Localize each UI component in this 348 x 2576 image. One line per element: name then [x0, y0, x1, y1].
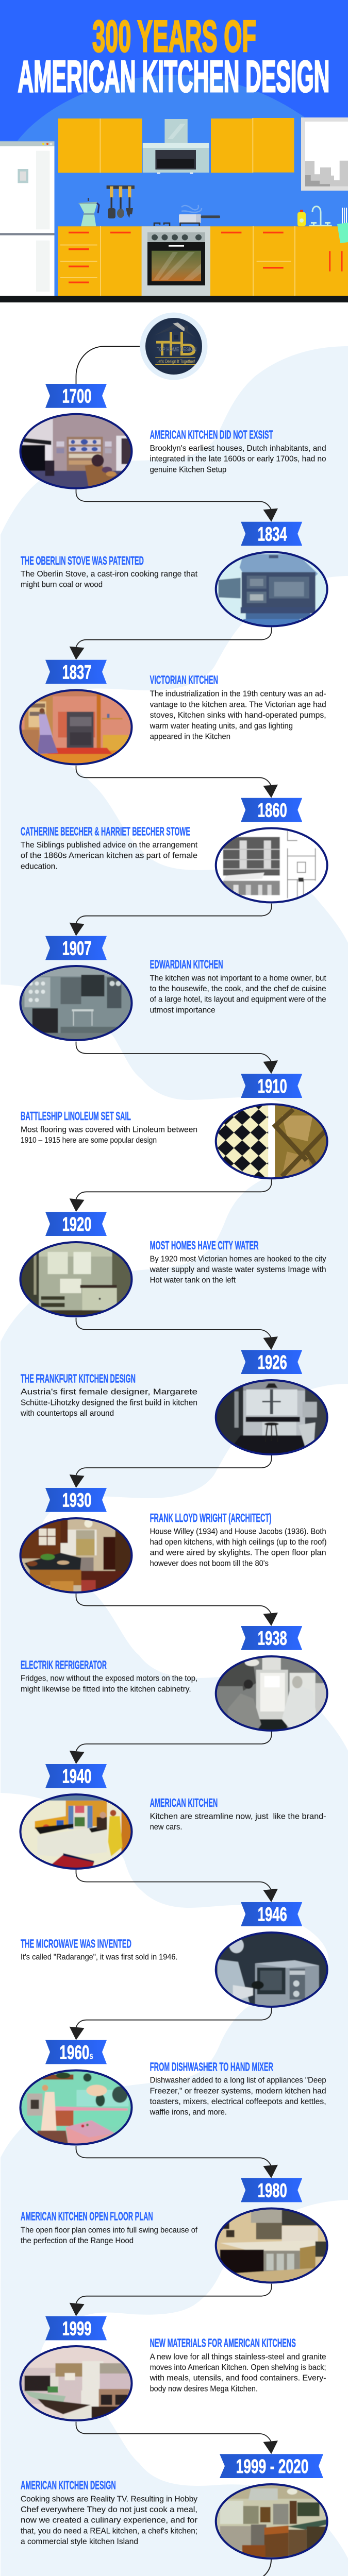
year banner 1910	[241, 1074, 302, 1098]
body text 1907: utmost importance	[150, 1006, 216, 1014]
photo: Frank Lloyd Wright kitchen	[20, 1517, 133, 1594]
year banner 1920: 1920	[62, 1214, 92, 1235]
heading: electric refrigerator: ELECTRIK REFRIGERATOR	[21, 1658, 107, 1671]
photo: linoleum patterns	[215, 1103, 328, 1179]
photo: early Dutch kitchen	[20, 413, 133, 489]
body text 1930: however does not boom till the 80's	[150, 1559, 269, 1568]
year banner 1860	[241, 798, 302, 822]
body text 1920: Hot water tank on the left	[150, 1276, 236, 1285]
year banner 1999 - 2020: 1999 - 2020	[236, 2456, 308, 2478]
body text 1920	[150, 1255, 326, 1285]
body text 1907	[150, 974, 326, 1014]
body text 1999-2020	[21, 2495, 198, 2546]
arrow: 1980 to 1999	[70, 2284, 272, 2316]
year banner 1980: 1980	[258, 2180, 287, 2201]
refrigerator	[0, 141, 55, 296]
body text 1999: moves into American Kitchen. Open shelving is back;	[150, 2363, 326, 2372]
body text 1999-2020: a commercial style kitchen Island	[21, 2537, 138, 2546]
towel and utensils	[337, 208, 348, 243]
body text 1940	[150, 1812, 326, 1832]
photo: stainless and granite kitchen	[20, 2345, 133, 2422]
body text 1907: to the housewife, the cook, and the chef de cuisine	[150, 985, 326, 993]
year banner 1946: 1946	[258, 1904, 287, 1926]
body text 1938: Fridges, now without the exposed motors on the top,	[21, 1674, 197, 1683]
year banner 1940: 1940	[62, 1766, 92, 1788]
year banner 1940	[45, 1764, 107, 1788]
photo: Frankfurt kitchen	[215, 1379, 328, 1456]
body text 1837	[150, 690, 326, 741]
arrow: 1910 to 1920	[70, 1179, 272, 1212]
body text 1910: Most flooring was covered with Linoleum between	[21, 1125, 197, 1134]
body text 1920: water supply and waste water systems Image with	[150, 1265, 326, 1274]
body text 1920: By 1920 most Victorian homes are hooked to the city	[150, 1255, 326, 1263]
body text 1837: appeared in the Kitchen	[150, 733, 230, 741]
body text 1999: body now desires Mega Kitchen.	[150, 2384, 258, 2393]
body text 1700: integrated in the late 1600s or early 1700s, had no	[150, 455, 326, 464]
arrow: 1999 to 1999-2020	[76, 2422, 278, 2454]
body text 1940: Kitchen are streamline now, just like the brand-	[150, 1812, 326, 1821]
body text 1834: might burn coal or wood	[21, 581, 103, 589]
arrow: 1860 to 1907	[70, 904, 272, 936]
year banner 1960s: 1960	[59, 2042, 89, 2063]
year banner 1930	[45, 1488, 107, 1512]
heading: Oberlin stove: THE OBERLIN STOVE WAS PATENTED	[21, 554, 144, 567]
body text 1907: The kitchen was not important to a home owner, but	[150, 974, 326, 982]
body text 1940: new cars.	[150, 1823, 182, 1832]
body text 1926: Schütte-Lihotzky designed the first build in kitchen	[21, 1398, 197, 1407]
body text 1910	[21, 1125, 197, 1145]
body text 1960s: Dishwasher added to a long list of appliances "Deep	[150, 2076, 326, 2085]
body text 1930: and were aired by skylights. The open floor plan	[150, 1549, 326, 1557]
year banner 1926: 1926	[258, 1352, 287, 1374]
body text 1930	[150, 1527, 327, 1568]
arrow: 1907 to 1910	[76, 1042, 278, 1074]
dish soap	[297, 210, 306, 226]
body text 1999	[150, 2352, 326, 2393]
arrow: 1940 to 1946	[76, 1870, 278, 1902]
year banner 1837: 1837	[62, 662, 92, 683]
year banner 1999: 1999	[62, 2318, 92, 2340]
logo badge	[140, 312, 207, 380]
photo: Radarange microwave	[215, 1931, 328, 2008]
body text 1700	[150, 444, 326, 474]
body text 1980	[21, 2226, 198, 2245]
year banner 1999 - 2020	[220, 2454, 323, 2478]
body text 1946: It's called "Radarange", it was first sold in 1946.	[21, 1953, 177, 1962]
photo: city water kitchen	[20, 1241, 133, 1317]
arrow: 1930 to 1938	[76, 1594, 278, 1626]
year banner 1837	[45, 660, 107, 684]
body text 1980: The open floor plan comes into full swing because of	[21, 2226, 198, 2234]
body text 1837: vantage to the kitchen area. The Victorian age had	[150, 701, 326, 709]
body text 1860	[21, 841, 198, 871]
body text 1930: had open kitchens, with high ceilings (up to the roof)	[150, 1538, 327, 1547]
arrow: 1837 to 1860	[76, 766, 278, 798]
year banner 1910: 1910	[258, 1076, 287, 1097]
year banner 1920	[45, 1212, 107, 1236]
logo badge: Let's Design It Together!	[157, 359, 195, 364]
photo: Edwardian kitchen	[20, 965, 133, 1041]
body text 1907: of a large hotel, its layout and equipment were of the	[150, 995, 326, 1004]
heading: microwave: THE MICROWAVE WAS INVENTED	[21, 1937, 131, 1951]
steaming pot on burners	[154, 205, 220, 226]
body text 1860: The Siblings published advice on the arrangement	[21, 841, 198, 850]
range hood	[143, 119, 209, 174]
body text 1834: The Oberlin Stove, a cast-iron cooking range that	[21, 570, 198, 579]
body text 1926	[20, 1388, 197, 1418]
body text 1930: House Willey (1934) and House Jacobs (1936). Both	[150, 1527, 326, 1536]
body text 1960s	[150, 2076, 326, 2117]
year banner 1834: 1834	[258, 523, 287, 545]
year banner 1946	[241, 1902, 302, 1926]
arrow: 1920 to 1926	[76, 1318, 278, 1350]
photo: open floor plan kitchen	[215, 2207, 328, 2283]
title	[18, 12, 329, 101]
body text 1999-2020: Cooking shows are Reality TV. Resulting in Hobby	[21, 2495, 197, 2503]
year banner 1960s: s	[90, 2050, 93, 2061]
body text 1837: stoves, Kitchen sinks with hand-operated pumps,	[150, 711, 326, 720]
moka pot	[78, 198, 99, 226]
stove	[142, 226, 210, 296]
heading: American kitchen design: AMERICAN KITCHEN DESIGN	[21, 2479, 116, 2492]
year banner 1999	[45, 2316, 107, 2340]
body text 1926: with countertops all around	[20, 1409, 114, 1418]
body text 1700: Brooklyn's earliest houses, Dutch inhabitants, and	[150, 444, 326, 453]
hanging utensils	[107, 185, 135, 218]
arrow: 1926 to 1930	[70, 1455, 272, 1488]
arrow: 1946 to 1960s	[70, 2008, 272, 2040]
body text 1926: Austria's first female designer, Margarete	[21, 1388, 197, 1397]
arrow: 1960s to 1980	[76, 2146, 278, 2178]
body text 1960s: toasters, mixers, electrical coffeepots and kettles,	[150, 2097, 326, 2106]
window with skyline	[301, 117, 348, 191]
faucet	[309, 207, 332, 226]
year banner 1980	[241, 2178, 302, 2202]
year banner 1700	[45, 384, 107, 408]
body text 1938: might likewise be fitted into the kitchen cabinetry.	[21, 1685, 191, 1693]
year banner 1930: 1930	[62, 1490, 92, 1512]
body text 1860: education.	[21, 862, 58, 871]
photo: commercial style kitchen	[215, 2483, 328, 2560]
upper cabinets right	[211, 118, 294, 173]
year banner 1938	[241, 1626, 302, 1650]
arrow: 1999-2020 to 2020	[168, 2560, 271, 2576]
year banner 1907	[45, 936, 107, 960]
heading: open floor plan: AMERICAN KITCHEN OPEN FLOOR PLAN	[21, 2209, 153, 2223]
arrow: 1938 to 1940	[70, 1732, 272, 1764]
body text 1999: A new love for all things stainless-steel and granite	[150, 2352, 326, 2361]
body text 1999: with meals, utensils, and food containers. Every-	[150, 2374, 326, 2383]
body text 1837: The industrialization in the 19th century was an ad-	[150, 690, 326, 699]
photo: streamlined 1940s kitchen	[20, 1793, 133, 1870]
lower cabinets	[58, 226, 348, 296]
heading: city water: MOST HOMES HAVE CITY WATER	[150, 1239, 259, 1252]
upper cabinets left	[58, 118, 142, 173]
heading: American kitchen: AMERICAN KITCHEN	[150, 1796, 218, 1809]
photo: Oberlin stove	[215, 551, 328, 628]
photo: electric refrigerator	[215, 1655, 328, 1732]
year banner 1960s	[45, 2040, 107, 2064]
body text 1834	[21, 570, 198, 589]
body text 1910: 1910 – 1915 here are some popular design	[21, 1136, 157, 1145]
body text 1700: genuine Kitchen Setup	[150, 465, 226, 474]
arrow: 1700 to 1834	[76, 489, 278, 522]
year banner 1907: 1907	[62, 938, 92, 959]
photo: Victorian kitchen	[20, 689, 133, 766]
body text 1960s: Freezer," or freezer systems, modern kitchen had	[150, 2087, 326, 2095]
body text 1980: the perfection of the Range Hood	[21, 2236, 134, 2245]
body text 1837: warm water heating units, and gas lighting	[150, 722, 293, 731]
year banner 1860: 1860	[258, 800, 287, 821]
heading: Victorian kitchen: VICTORIAN KITCHEN	[150, 673, 218, 687]
body text 1999-2020: that, you do need a REAL kitchen, a chef's kitchen;	[21, 2527, 197, 2535]
heading: Beecher sisters: CATHERINE BEECHER & HARRIET BEECHER STOWE	[21, 825, 190, 838]
heading: Frankfurt kitchen: THE FRANKFURT KITCHEN DESIGN	[21, 1371, 136, 1385]
heading: Battleship linoleum: BATTLESHIP LINOLEUM SET SAIL	[21, 1109, 131, 1123]
year banner 1834	[241, 522, 302, 546]
body text 1999-2020: Chef everywhere They do not just cook a meal,	[21, 2505, 197, 2514]
heading: Edwardian kitchen: EDWARDIAN KITCHEN	[150, 957, 223, 971]
year banner 1700: 1700	[62, 386, 92, 408]
body text 1938	[21, 1674, 197, 1693]
logo badge: TOP HOME DESIGN	[157, 347, 196, 353]
body text 1860: of the 1860s American kitchen as part of female	[21, 852, 197, 860]
body text 1999-2020: now we created a culinary experience, and for	[21, 2516, 198, 2525]
year banner 1938: 1938	[258, 1628, 287, 1650]
arrow: 1834 to 1837	[70, 628, 272, 660]
header panel: kitchen illustration	[0, 0, 348, 302]
body text 1960s: waffle irons, and more.	[150, 2108, 227, 2117]
photo: Beecher kitchen plan	[215, 827, 328, 904]
arrow: logo to 1700	[76, 346, 140, 384]
photo: 1960s mint kitchen	[20, 2069, 133, 2145]
year banner 1926	[241, 1350, 302, 1374]
